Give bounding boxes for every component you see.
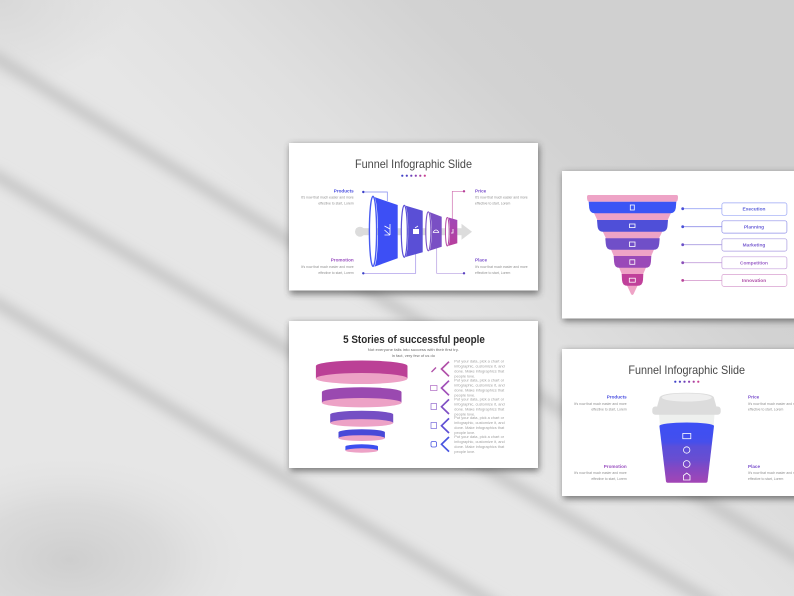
panel: funnel slide with horizontal cones	[289, 143, 539, 294]
text: promotion	[301, 258, 354, 275]
row 1: icon, chevron, text: Put your data, pick a chart or	[454, 359, 505, 364]
row 4: icon, chevron, text: Put your data, pick a chart or	[454, 415, 505, 420]
panel: funnel slide with cup	[562, 349, 794, 499]
text: place	[475, 258, 528, 275]
funnel band 1	[589, 202, 676, 213]
callout: marketing	[681, 239, 787, 251]
row 1: icon, chevron, text: people love.	[454, 374, 475, 379]
funnel cone 3	[426, 212, 442, 251]
connector: place	[437, 248, 465, 274]
callout: execution: Execution	[743, 207, 766, 213]
text: products: It's now that much easier and more	[301, 196, 354, 200]
row 5: icon, chevron, text	[431, 434, 505, 454]
panel: five stories slide with stacked discs	[289, 321, 539, 471]
panel: vertical tiered funnel slide	[562, 171, 794, 321]
cup: clear upper body	[659, 414, 714, 428]
callout: innovation: Innovation	[742, 278, 766, 284]
row 3: icon, chevron, text	[431, 396, 505, 416]
funnel: pink body	[587, 195, 678, 295]
callout: competition: Competition	[740, 261, 768, 267]
disc 1	[316, 360, 408, 384]
row 5: icon, chevron, text: Put your data, pick a chart or	[454, 434, 505, 439]
row 5: icon, chevron, text: infographic, customize it, and	[454, 439, 505, 444]
text: promotion: effective to start, Lorem	[318, 271, 354, 275]
connector: price	[452, 190, 465, 219]
row 2: icon, chevron, text: done. Make infographics that	[454, 388, 505, 392]
text: place	[748, 464, 794, 481]
text: place: It's now that much easier and more	[475, 265, 528, 269]
row 5: icon, chevron, text: done. Make infographics that	[454, 444, 505, 449]
text: place: Place	[748, 464, 760, 469]
text: products: effective to start, Lorem	[591, 408, 627, 412]
arrow: grey direction arrow	[355, 224, 472, 240]
funnel band 4	[614, 256, 651, 268]
row 2: icon, chevron, text	[430, 378, 505, 398]
funnel cone 4	[446, 217, 457, 246]
callout: marketing: Marketing	[743, 243, 765, 249]
subtitle: Not everyone falls into success with their first try.	[368, 347, 459, 352]
text: price: Price	[475, 188, 487, 193]
funnel cone 1	[369, 196, 398, 267]
connector: promotion	[362, 253, 416, 274]
disc 3	[330, 411, 393, 427]
row 3: icon, chevron, text: done. Make infographics that	[454, 406, 505, 411]
row 3: icon, chevron, text: infographic, customize it, and	[454, 401, 505, 406]
title dots	[674, 381, 699, 383]
text: price: It's now that much easier and more	[475, 196, 528, 200]
subtitle	[368, 347, 459, 358]
callout: planning: Planning	[744, 225, 764, 231]
row 2: icon, chevron, text: Put your data, pick a chart or	[454, 378, 505, 382]
text: promotion: Promotion	[604, 464, 627, 469]
row 2: icon, chevron, text: infographic, customize it, and	[454, 382, 505, 388]
text: promotion	[574, 464, 627, 481]
text: products: effective to start, Lorem	[318, 202, 354, 206]
text: products: It's now that much easier and more	[574, 402, 627, 406]
title: Funnel Infographic Slide	[355, 158, 472, 171]
subtitle: In fact, very few of us do	[392, 353, 436, 358]
text: promotion: It's now that much easier and more	[301, 265, 354, 269]
row 1: icon, chevron, text	[432, 359, 505, 379]
text: place: effective to start, Lorem	[475, 271, 511, 275]
connector: products	[362, 191, 387, 201]
row 5: icon, chevron, text: people love.	[454, 449, 475, 454]
text: products: Products	[334, 188, 354, 193]
row 1: icon, chevron, text: done. Make infographics that	[454, 369, 505, 374]
text: promotion: It's now that much easier and more	[574, 471, 627, 475]
row 4: icon, chevron, text: done. Make infographics that	[454, 425, 505, 430]
callout: planning	[681, 221, 787, 233]
text: products	[301, 188, 354, 206]
row 1: icon, chevron, text: infographic, customize it, and	[454, 364, 505, 369]
row 2: icon, chevron, text: people love.	[454, 392, 475, 398]
funnel cone 2	[401, 205, 423, 257]
text: price: Price	[748, 394, 760, 400]
callout: competition	[681, 257, 787, 269]
text: products	[574, 394, 627, 412]
text: products: Products	[607, 394, 627, 400]
cup: gradient liquid	[659, 423, 714, 483]
callout: innovation	[681, 274, 787, 286]
cup: lid	[652, 393, 721, 415]
funnel band 3	[605, 238, 660, 250]
disc 4	[338, 429, 385, 441]
title: Funnel Infographic Slide	[628, 364, 745, 377]
title dots	[401, 175, 426, 177]
callout: execution	[681, 203, 787, 215]
row 3: icon, chevron, text: Put your data, pick a chart or	[454, 396, 505, 401]
row 3: icon, chevron, text: people love.	[454, 411, 475, 416]
text: price: effective to start, Lorem	[748, 408, 784, 412]
funnel band 2	[597, 220, 668, 232]
title: 5 Stories of successful people	[343, 334, 485, 346]
funnel band 5	[622, 274, 643, 286]
text: place: effective to start, Lorem	[748, 477, 784, 481]
row 4: icon, chevron, text: people love.	[454, 430, 475, 435]
text: place: Place	[475, 258, 487, 262]
disc 5	[345, 444, 378, 453]
text: price	[475, 188, 528, 206]
text: price: effective to start, Lorem	[475, 202, 511, 206]
row 4: icon, chevron, text: infographic, customize it, and	[454, 420, 505, 425]
row 4: icon, chevron, text	[431, 415, 505, 435]
disc 2	[322, 387, 402, 407]
text: promotion: effective to start, Lorem	[591, 477, 627, 481]
text: promotion: Promotion	[331, 258, 354, 262]
text: price	[748, 394, 794, 412]
